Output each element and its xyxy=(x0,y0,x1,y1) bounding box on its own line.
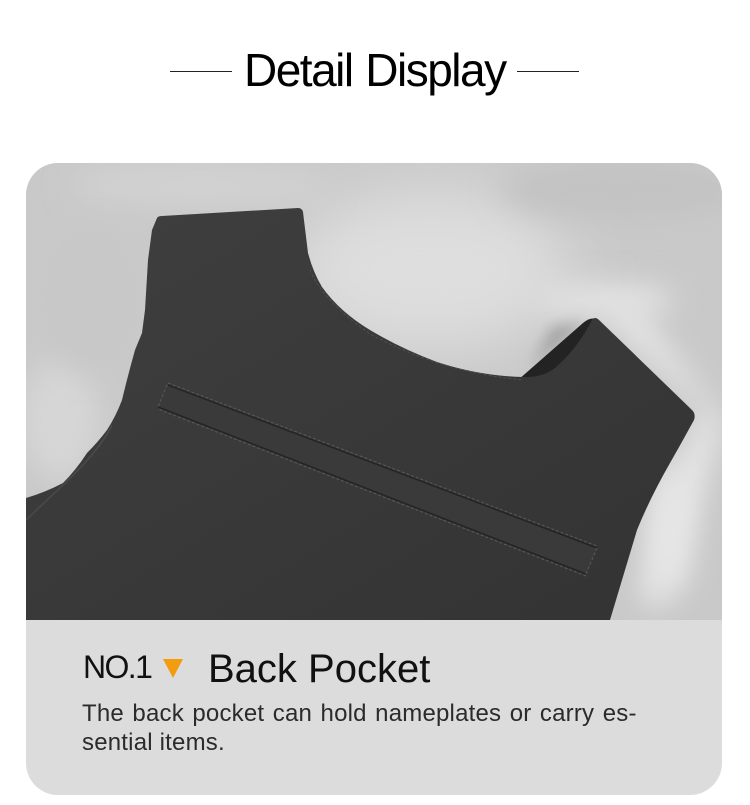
cast shadow behind far shoulder xyxy=(532,318,581,364)
caption heading: number label: NO.1 xyxy=(83,649,151,685)
neckline stitch xyxy=(310,270,523,380)
left seam fold xyxy=(26,425,112,520)
caption heading: feature name: Back Pocket xyxy=(208,647,430,691)
back pocket xyxy=(158,383,597,576)
title text: Detail Display xyxy=(244,44,506,96)
photo background xyxy=(20,160,740,620)
vest body xyxy=(26,208,695,620)
icon: orange down triangle xyxy=(163,659,183,678)
caption description: The back pocket can hold nameplates or carry es- xyxy=(82,700,637,727)
caption description xyxy=(82,700,637,756)
vest inner back fold xyxy=(522,318,594,378)
product photo panel xyxy=(26,163,722,795)
caption panel background xyxy=(26,620,722,795)
caption description: sential items. xyxy=(82,729,225,756)
